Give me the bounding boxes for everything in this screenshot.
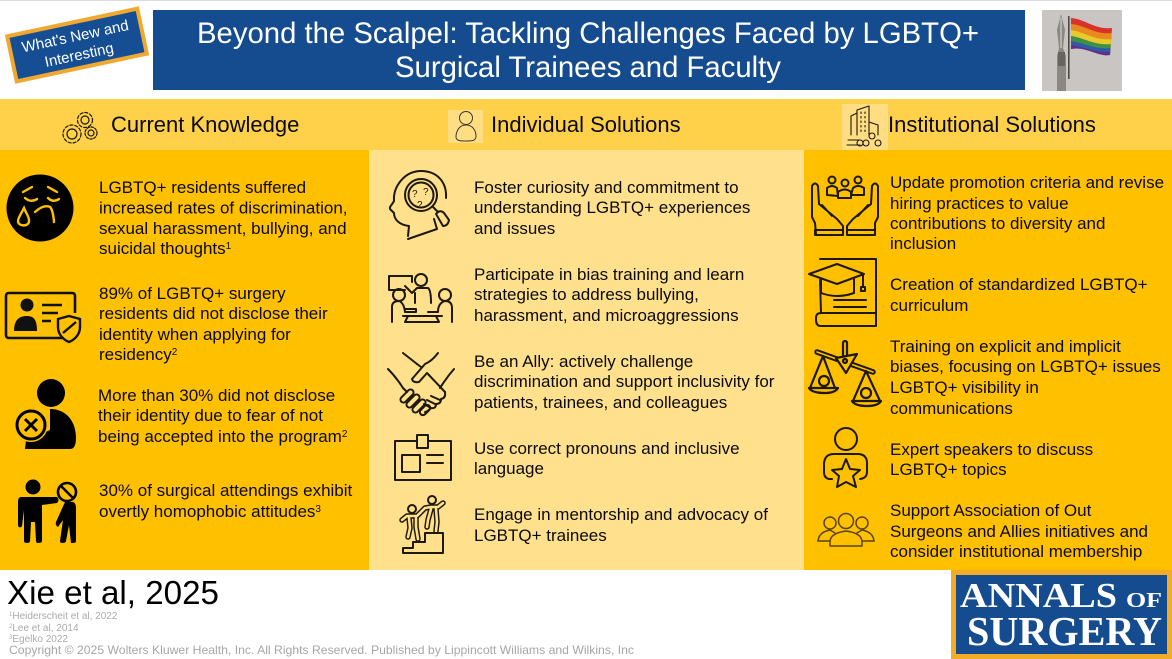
icon: crying face bbox=[6, 174, 74, 242]
text: fear of not being accepted: their identity due to fear of not bbox=[98, 406, 323, 425]
text: discrimination: suicidal thoughts bbox=[99, 239, 226, 258]
icon: balance scales bbox=[809, 341, 881, 406]
text: curriculum: curriculum bbox=[890, 296, 968, 315]
icon: name badge bbox=[395, 435, 451, 480]
logo: Annals of Surgery: SURGERY bbox=[967, 608, 1162, 654]
text: association of out surgeons bbox=[890, 501, 1148, 561]
text: foster curiosity: Foster curiosity and commitment to bbox=[474, 178, 739, 197]
title banner: Surgical Trainees and Faculty bbox=[395, 51, 781, 84]
badge: What's New and Interesting: Interesting bbox=[43, 40, 115, 71]
references: Egelko 2022 bbox=[12, 634, 68, 645]
text: fear of not being accepted: being accepted into the program bbox=[98, 427, 342, 446]
text: discrimination: sexual harassment, bullying, and bbox=[99, 219, 347, 238]
text: biases training: LGBTQ+ visibility in bbox=[890, 378, 1039, 397]
icon: hands holding people bbox=[812, 176, 878, 235]
text: bias training: harassment, and microaggressions bbox=[474, 306, 739, 325]
heading: Institutional Solutions bbox=[842, 104, 1096, 150]
text: association of out surgeons: Surgeons and Allies initiatives and bbox=[890, 522, 1148, 541]
icon: group of people bbox=[818, 514, 874, 546]
heading: Individual Solutions: Individual Solutions bbox=[491, 112, 681, 137]
heading: Current Knowledge: Current Knowledge bbox=[111, 112, 299, 137]
text: curriculum: Creation of standardized LGBTQ+ bbox=[890, 275, 1148, 294]
heading: Institutional Solutions: Institutional Solutions bbox=[888, 112, 1096, 137]
text: association of out surgeons: Support Association of Out bbox=[890, 501, 1092, 520]
icon: person with X bbox=[14, 379, 76, 449]
icon: head with magnifier bbox=[390, 171, 449, 239]
text: homophobic attitudes: 30% of surgical attendings exhibit bbox=[99, 481, 353, 500]
header band bbox=[0, 99, 1172, 150]
panel: Individual Solutions bbox=[369, 150, 804, 570]
logo: Annals of Surgery bbox=[951, 570, 1172, 659]
text: bias training bbox=[474, 265, 744, 325]
text: discrimination bbox=[99, 178, 348, 258]
badge: What's New and Interesting: What's New and bbox=[20, 17, 130, 56]
panel: Institutional Solutions bbox=[804, 150, 1172, 570]
text: discrimination: 1 bbox=[226, 241, 232, 252]
title banner bbox=[153, 10, 1025, 90]
citation: Xie et al, 2025: Xie et al, 2025 bbox=[7, 574, 219, 611]
text: biases training: Training on explicit and implicit bbox=[890, 337, 1121, 356]
logo: Annals of Surgery: OF bbox=[1126, 588, 1162, 612]
text: biases training bbox=[890, 337, 1161, 418]
references: 2 bbox=[9, 624, 13, 630]
text: association of out surgeons: consider institutional membership bbox=[890, 542, 1142, 561]
text: did not disclose identity: 89% of LGBTQ+ surgery bbox=[99, 284, 286, 303]
text: mentorship: LGBTQ+ trainees bbox=[474, 526, 607, 545]
text: promotion criteria: Update promotion criteria and revise bbox=[890, 173, 1164, 192]
text: did not disclose identity bbox=[99, 284, 328, 364]
text: expert speakers bbox=[890, 440, 1093, 479]
heading: Current Knowledge bbox=[63, 112, 299, 143]
text: promotion criteria: hiring practices to value bbox=[890, 194, 1069, 213]
text: discrimination: LGBTQ+ residents suffered bbox=[99, 178, 306, 197]
text: be an ally: discrimination and support inclusivity for bbox=[474, 372, 775, 391]
icon: book with graduation cap bbox=[809, 259, 876, 326]
text: promotion criteria: contributions to diversity and bbox=[890, 214, 1105, 233]
copyright: Copyright © 2025 Wolters Kluwer Health, Inc. All Rights Reserved. Published by Lippincott Williams and Wilkins, Inc bbox=[9, 643, 634, 657]
title banner: Beyond the Scalpel: Tackling Challenges Faced by LGBTQ+ bbox=[197, 17, 979, 50]
text: did not disclose identity: identity when applying for bbox=[99, 325, 291, 344]
text: correct pronouns bbox=[474, 439, 740, 478]
references bbox=[9, 611, 118, 645]
text: biases training: biases, focusing on LGBTQ+ issues bbox=[890, 357, 1161, 376]
icon: head with magnifier: ? bbox=[412, 189, 418, 200]
text: be an ally: patients, trainees, and colleagues bbox=[474, 393, 727, 412]
icon: handshake bbox=[388, 353, 454, 416]
text: expert speakers: Expert speakers to discuss bbox=[890, 440, 1093, 459]
text: fear of not being accepted: 2 bbox=[342, 429, 348, 440]
text: did not disclose identity: residency bbox=[99, 345, 172, 364]
references: Lee et al, 2014 bbox=[12, 623, 79, 634]
text: foster curiosity bbox=[474, 178, 750, 238]
text: fear of not being accepted: More than 30% did not disclose bbox=[98, 386, 335, 405]
text: homophobic attitudes: overtly homophobic attitudes bbox=[99, 502, 315, 521]
text: did not disclose identity: residents did not disclose their bbox=[99, 304, 328, 323]
text: curriculum bbox=[890, 275, 1148, 315]
image: scalpel and rainbow flag bbox=[1042, 10, 1122, 91]
icon: climbing stairs mentorship bbox=[402, 496, 443, 553]
text: correct pronouns: Use correct pronouns and inclusive bbox=[474, 439, 740, 458]
text: discrimination: increased rates of discrimination, bbox=[99, 198, 348, 218]
text: be an ally bbox=[474, 352, 775, 412]
text: mentorship bbox=[474, 505, 768, 545]
text: promotion criteria bbox=[890, 173, 1164, 253]
text: foster curiosity: understanding LGBTQ+ experiences bbox=[474, 198, 750, 217]
text: correct pronouns: language bbox=[474, 459, 544, 478]
text: bias training: Participate in bias training and learn bbox=[474, 265, 744, 284]
text: homophobic attitudes bbox=[99, 481, 353, 521]
text: homophobic attitudes: 3 bbox=[315, 504, 321, 515]
text: foster curiosity: and issues bbox=[474, 219, 555, 238]
icon: homophobic gesture figures bbox=[18, 480, 76, 543]
text: fear of not being accepted bbox=[98, 386, 348, 446]
text: mentorship: Engage in mentorship and advocacy of bbox=[474, 505, 768, 524]
text: biases training: communications bbox=[890, 399, 1013, 418]
panel: Current Knowledge bbox=[0, 150, 369, 570]
icon: ID card with shield bbox=[6, 293, 80, 342]
badge: What's New and Interesting bbox=[7, 9, 147, 81]
icon: head with magnifier: ? bbox=[417, 200, 423, 211]
icon: speaker with star bbox=[824, 428, 867, 487]
references: 3 bbox=[9, 635, 13, 641]
references: Heiderscheit et al, 2022 bbox=[12, 611, 118, 622]
icon: bias training meeting bbox=[389, 274, 452, 322]
text: be an ally: Be an Ally: actively challenge bbox=[474, 352, 693, 371]
text: expert speakers: LGBTQ+ topics bbox=[890, 460, 1007, 479]
heading: Individual Solutions bbox=[448, 110, 681, 143]
icon: head with magnifier: ? bbox=[423, 187, 429, 198]
text: did not disclose identity: 2 bbox=[172, 347, 178, 358]
text: promotion criteria: inclusion bbox=[890, 234, 956, 253]
references: 1 bbox=[9, 612, 13, 618]
text: bias training: strategies to address bullying, bbox=[474, 285, 699, 304]
logo: Annals of Surgery: ANNALS bbox=[960, 576, 1117, 615]
